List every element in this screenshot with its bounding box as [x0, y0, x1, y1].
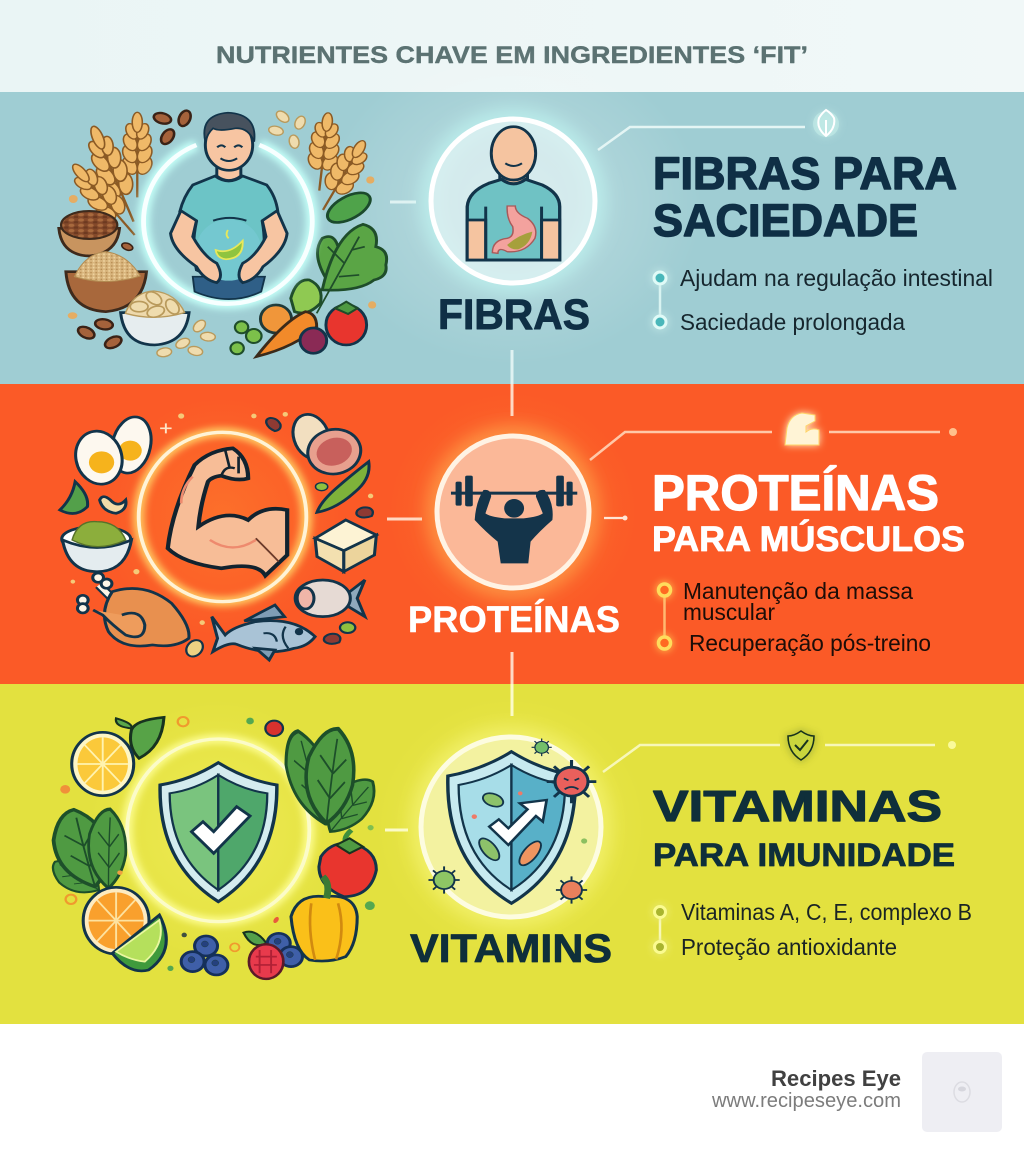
footer brand: Recipes Eye	[771, 1066, 901, 1091]
heading: vitaminas para imunidade: PARA IMUNIDADE	[653, 837, 955, 873]
connector line with shield icon	[603, 731, 956, 772]
heading: fibras para saciedade: SACIEDADE	[653, 195, 918, 246]
panel: proteinas	[0, 384, 1024, 684]
bullets: fibras: Ajudam na regulação intestinal	[680, 265, 993, 291]
bullets: proteinas: Manutenção da massa	[683, 578, 913, 604]
footer brand: www.recipeseye.com	[711, 1090, 901, 1112]
heading: fibras para saciedade	[653, 148, 957, 246]
arrow	[604, 516, 628, 520]
label: vitamins: VITAMINS	[410, 927, 612, 971]
illustration: vitamin foods and shield	[45, 717, 386, 979]
connector line with muscle icon	[590, 413, 957, 460]
title: NUTRIENTES CHAVE EM INGREDIENTES ‘FIT’	[216, 42, 808, 69]
logo box	[922, 1052, 1002, 1132]
connector	[387, 384, 512, 684]
bullets: proteinas: muscular	[683, 599, 775, 625]
icon: shield with viruses	[421, 737, 601, 917]
bullets: vitaminas: Proteção antioxidante	[681, 934, 897, 960]
ring	[144, 145, 312, 304]
bullets: proteinas	[658, 578, 931, 656]
icon: weightlifter	[437, 436, 589, 588]
bullets: fibras	[654, 265, 993, 335]
illustration: protein foods and arm	[60, 411, 376, 660]
bullets: proteinas: Recuperação pós-treino	[689, 630, 931, 656]
icon: person with stomach	[431, 119, 595, 283]
bullets: fibras: Saciedade prolongada	[680, 309, 905, 335]
shield	[160, 763, 277, 902]
connector	[385, 684, 512, 830]
heading: fibras para saciedade: FIBRAS PARA	[653, 148, 957, 199]
panel: fibras	[0, 45, 1024, 416]
label: fibras: FIBRAS	[438, 291, 590, 339]
heading: vitaminas para imunidade	[653, 782, 955, 873]
heading: proteinas para musculos	[652, 465, 965, 559]
heading: proteinas para musculos: PROTEÍNAS	[652, 465, 939, 521]
connector	[390, 202, 512, 416]
bullets: vitaminas: Vitaminas A, C, E, complexo B	[681, 899, 972, 925]
label: proteinas: PROTEÍNAS	[408, 599, 620, 640]
heading: proteinas para musculos: PARA MÚSCULOS	[652, 519, 965, 559]
footer brand	[711, 1052, 1002, 1132]
panel: vitaminas	[0, 684, 1024, 1024]
connector line with leaf icon	[598, 110, 839, 150]
man	[193, 277, 265, 299]
illustration: fibre foods and man	[59, 109, 387, 358]
heading: vitaminas para imunidade: VITAMINAS	[653, 782, 942, 831]
header band	[0, 0, 1024, 92]
bullets: vitaminas	[654, 899, 972, 960]
